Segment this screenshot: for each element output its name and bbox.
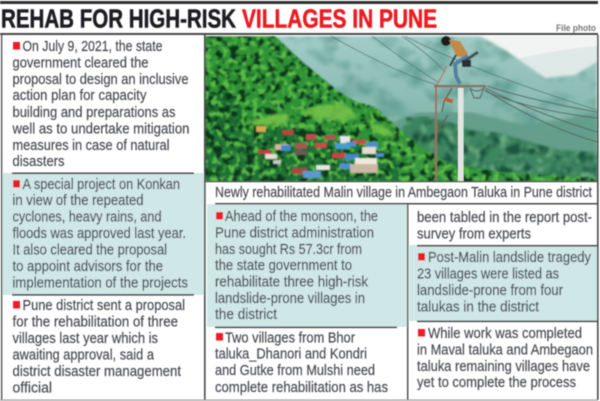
text block: post-Malin listing: 23 villages were listed as <box>417 266 559 282</box>
top rule <box>0 1 598 4</box>
text block: Rs 57.3cr request: Pune district administration <box>215 224 374 242</box>
text block: Konkan project: in view of the repeated <box>12 192 144 209</box>
text block: Pune district proposal: for the rehabilitation of three <box>12 314 178 330</box>
text block: villages needing rehabilitation: and Gutke from Mulshi need <box>215 362 375 379</box>
text block: work status <box>417 325 593 391</box>
text block: Rs 57.3cr request <box>215 208 378 323</box>
power lines <box>331 36 597 110</box>
green meadow patches <box>245 104 398 138</box>
headline: VILLAGES IN PUNE <box>242 6 437 34</box>
text block: villages needing rehabilitation <box>215 330 388 396</box>
text block: continuation <box>417 209 592 242</box>
text block: Rs 57.3cr request: rehabilitate three high-risk <box>215 274 368 290</box>
text block: Pune district proposal: Pune district sent a proposal <box>22 297 185 314</box>
headline: REHAB FOR HIGH-RISK <box>1 6 236 34</box>
text block: Pune district proposal: official <box>12 380 52 396</box>
text block: work status: yet to complete the process <box>417 374 576 391</box>
text block: villages needing rehabilitation: Two villages from Bhor <box>225 330 355 346</box>
text block: July 9 decision: well as to undertake mitigation <box>12 120 189 138</box>
text block: Rs 57.3cr request: landslide-prone villages in <box>215 290 365 307</box>
text block: post-Malin listing: landslide-prone from four <box>417 282 563 299</box>
text block: Konkan project: floods was approved last year. <box>12 225 186 242</box>
photo credit: File photo <box>556 23 596 33</box>
text block: Pune district proposal: villages last year which is <box>12 330 158 347</box>
text block: Konkan project: A special project on Konkan <box>22 176 180 193</box>
text block: villages needing rehabilitation: complete rehabilitation as has <box>215 379 388 396</box>
text block: Konkan project <box>12 176 188 292</box>
text block: July 9 decision: measures in case of natural <box>12 137 170 154</box>
text block: Pune district proposal: awaiting approval, said a <box>12 346 155 364</box>
lineman <box>441 36 478 84</box>
text block: villages needing rehabilitation: taluka_Dhanori and Kondri <box>215 346 367 362</box>
text block: post-Malin listing <box>417 249 591 316</box>
photo: Malin village and lineman on pole <box>205 36 597 181</box>
utility pole <box>434 66 486 181</box>
text block: July 9 decision: On July 9, 2021, the state <box>22 38 162 55</box>
text block: Pune district proposal: district disaster management <box>12 363 182 380</box>
text block: July 9 decision: proposal to design an inclusive <box>12 71 188 88</box>
headline <box>1 6 437 34</box>
text block: July 9 decision <box>12 38 189 170</box>
text block: July 9 decision: building and preparations as <box>12 104 176 121</box>
text block: Rs 57.3cr request: Ahead of the monsoon, the <box>225 208 378 225</box>
text block: Konkan project: to appoint advisors for the <box>12 258 163 275</box>
text block: Konkan project: cyclones, heavy rains, and <box>12 208 162 226</box>
text block: July 9 decision: action plan for capacity <box>12 87 147 104</box>
text block: Rs 57.3cr request: the state government to <box>215 257 352 274</box>
text block: post-Malin listing: talukas in the district <box>417 298 540 316</box>
text block: July 9 decision: government cleared the <box>12 54 148 72</box>
cable bundle <box>485 86 597 142</box>
text block: Rs 57.3cr request: the district <box>215 306 278 323</box>
text block: Rs 57.3cr request: has sought Rs 57.3cr from <box>215 241 362 258</box>
text block: Konkan project: It also cleared the proposal <box>12 242 167 258</box>
text block: continuation: survey from experts <box>417 226 531 242</box>
text block: July 9 decision: disasters <box>12 153 64 170</box>
panel backgrounds: teal highlight bands <box>2 173 598 327</box>
village houses <box>256 126 384 178</box>
text block: Konkan project: implementation of the projects <box>12 274 188 292</box>
text block: Pune district proposal <box>12 297 185 396</box>
